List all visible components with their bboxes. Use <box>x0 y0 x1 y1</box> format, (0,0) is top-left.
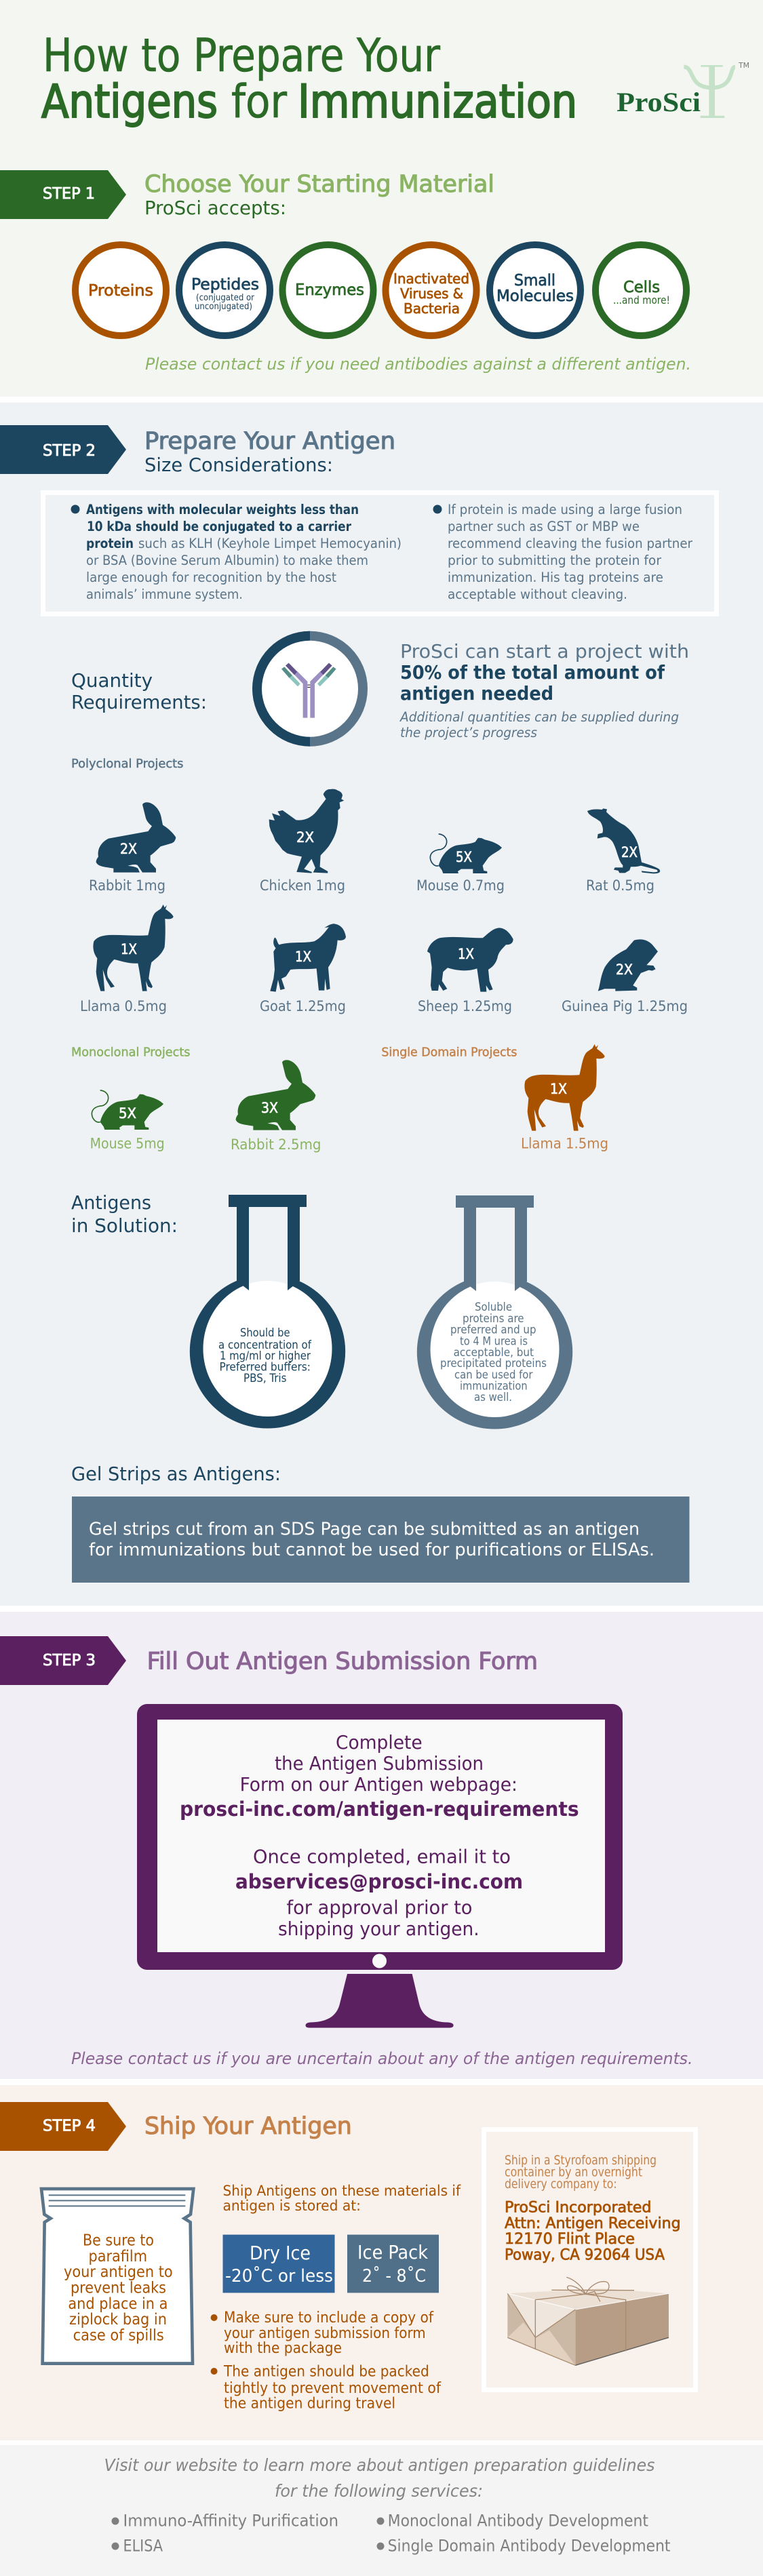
panel: size considerations box: immunization. His tag proteins are <box>448 570 663 585</box>
icon: chicken polyclonal: 2X <box>296 829 314 846</box>
panel: size considerations box: or BSA (Bovine Serum Albumin) to make them <box>86 553 368 568</box>
icon: sheep polyclonal <box>418 928 513 1014</box>
panel: size considerations box: such as KLH (Keyhole Limpet Hemocyanin) <box>138 536 402 551</box>
logo: ProSci: ProSci <box>617 87 701 117</box>
icon: ziplock bag: parafilm <box>88 2248 147 2265</box>
icon: flask solubility: acceptable, but <box>454 1346 534 1360</box>
panel: shipping address: 12170 Flint Place <box>505 2230 635 2248</box>
box: ice pack: Ice Pack <box>357 2242 429 2263</box>
note: uncertain about requirements: Please contact us if you are uncertain about any of the antigen requirements. <box>71 2049 693 2068</box>
heading: fill out antigen submission form: Fill Out Antigen Submission Form <box>147 1648 538 1675</box>
heading: single domain projects: Single Domain Projects <box>381 1046 517 1059</box>
panel: shipping address: ProSci Incorporated <box>505 2199 651 2217</box>
heading: antigens in solution <box>71 1191 178 1237</box>
icon: goat polyclonal: Goat 1.25mg <box>260 998 346 1014</box>
icon: computer monitor with instructions: prosci-inc.com/antigen-requirements <box>180 1798 579 1821</box>
circle: peptides <box>179 245 270 336</box>
icon: flask concentration: Should be <box>240 1326 290 1340</box>
list: services: Single Domain Antibody Development <box>388 2537 670 2556</box>
icon: guinea pig polyclonal <box>562 939 688 1014</box>
panel: shipping address <box>484 2129 696 2390</box>
icon: mouse polyclonal: Mouse 0.7mg <box>416 877 505 894</box>
panel: size considerations box: partner such as GST or MBP we <box>448 519 640 534</box>
icon: flask solubility: precipitated proteins <box>440 1357 547 1370</box>
icon: mouse monoclonal: 5X <box>119 1105 136 1122</box>
icon: sheep polyclonal: 1X <box>458 946 474 962</box>
list: services <box>111 2511 670 2556</box>
list: shipping tips <box>211 2309 442 2413</box>
icon: llama single domain: 1X <box>550 1081 567 1097</box>
callout: 50 percent of antigen: 50% of the total amount of <box>400 661 665 683</box>
icon: llama polyclonal <box>80 905 174 1014</box>
text: visit our website: Visit our website to learn more about antigen preparation guidelines <box>104 2455 655 2475</box>
note: contact us different antigen: Please contact us if you need antibodies against a different antigen. <box>145 355 691 374</box>
heading: antigens in solution: in Solution: <box>71 1214 178 1237</box>
text: ship antigens on these materials: Ship Antigens on these materials if <box>222 2183 461 2200</box>
icon: rat polyclonal <box>586 808 660 894</box>
arrow: step 4: STEP 4 <box>43 2117 96 2135</box>
box: dry ice <box>222 2235 335 2293</box>
heading: prepare your antigen: Prepare Your Antigen <box>144 428 395 455</box>
icon: sheep polyclonal: Sheep 1.25mg <box>418 998 512 1014</box>
panel: size considerations box: Antigens with molecular weights less than <box>86 502 359 517</box>
icon: chicken polyclonal <box>260 789 345 894</box>
box: ice pack: 2˚ - 8˚C <box>362 2266 426 2286</box>
icon: ziplock bag: and place in a <box>68 2295 168 2313</box>
panel: size considerations box: If protein is made using a large fusion <box>448 502 682 517</box>
circle: small molecules: Small <box>514 271 555 290</box>
icon: computer monitor with instructions: shipping your antigen. <box>278 1918 480 1940</box>
title: for <box>231 75 288 129</box>
logo: ProSci <box>617 61 749 118</box>
icon: flask solubility: preferred and up <box>450 1324 536 1337</box>
icon: computer monitor with instructions: for approval prior to <box>286 1897 472 1919</box>
callout: 50 percent of antigen: the project’s progress <box>400 725 537 740</box>
panel: size considerations box: large enough for recognition by the host <box>86 570 336 585</box>
icon: ziplock bag: ziplock bag in <box>69 2311 167 2329</box>
text: ship antigens on these materials <box>222 2183 461 2215</box>
icon: computer monitor with instructions: Once completed, email it to <box>253 1846 511 1868</box>
heading: quantity requirements: Quantity <box>71 669 153 692</box>
callout: 50 percent of antigen <box>399 640 689 740</box>
circle: small molecules: Molecules <box>496 286 574 305</box>
list: services: Immuno-Affinity Purification <box>123 2511 338 2530</box>
title: Immunization <box>298 75 577 129</box>
circle: enzymes: Enzymes <box>295 280 364 299</box>
panel: size considerations box: animals’ immune system. <box>86 587 243 602</box>
icon: llama single domain: Llama 1.5mg <box>521 1135 608 1151</box>
icon: flask concentration: 1 mg/ml or higher <box>220 1349 311 1363</box>
circle: cells and more: Cells <box>623 277 660 296</box>
icon: ziplock bag: Be sure to <box>83 2232 154 2250</box>
icon: guinea pig polyclonal: 2X <box>616 962 633 978</box>
icon: wrapped package <box>507 2277 669 2365</box>
title: Antigens <box>41 75 218 129</box>
list: shipping tips: the antigen during travel <box>224 2395 395 2413</box>
panel: shipping address: container by an overnight <box>505 2164 642 2179</box>
text: visit our website <box>104 2455 655 2501</box>
list: shipping tips: your antigen submission form <box>224 2324 426 2342</box>
icon: flask solubility: proteins are <box>463 1312 524 1326</box>
arrow: step 1: STEP 1 <box>43 185 95 203</box>
circle: proteins: Proteins <box>88 281 153 300</box>
subheading: prosci accepts: ProSci accepts: <box>144 197 286 219</box>
icon: computer monitor with instructions: Complete <box>336 1732 423 1753</box>
arrow: step 4 <box>0 2102 126 2151</box>
icon: flask concentration: Preferred buffers: <box>220 1361 311 1374</box>
list: shipping tips: with the package <box>224 2339 342 2357</box>
icon: computer monitor with instructions: Form on our Antigen webpage: <box>240 1774 517 1796</box>
heading: gel strips as antigens: Gel Strips as Antigens: <box>71 1463 281 1485</box>
icon: chicken polyclonal: Chicken 1mg <box>260 877 345 894</box>
icon: computer monitor with instructions <box>137 1704 623 2027</box>
icon: flask concentration: a concentration of <box>218 1339 312 1352</box>
panel: shipping address: Attn: Antigen Receiving <box>505 2215 681 2232</box>
panel: step 4 <box>0 2085 763 2440</box>
panel: header and step 1 <box>0 0 763 397</box>
circle: proteins <box>75 245 166 336</box>
heading: quantity requirements: Requirements: <box>71 691 207 713</box>
icon: flask solubility: can be used for <box>454 1368 533 1382</box>
panel: gel strips note: for immunizations but cannot be used for purifications or ELISAs. <box>89 1540 654 1560</box>
panel: gel strips note <box>72 1497 689 1583</box>
icon: flask solubility: as well. <box>474 1391 512 1404</box>
icon: mouse polyclonal: 5X <box>456 849 472 865</box>
heading: quantity requirements <box>71 669 207 713</box>
icon: mouse monoclonal: Mouse 5mg <box>90 1135 165 1151</box>
circle: inactivated viruses and bacteria: Inactivated <box>393 271 469 287</box>
callout: 50 percent of antigen: antigen needed <box>400 682 553 705</box>
heading: monoclonal projects: Monoclonal Projects <box>71 1046 190 1059</box>
arrow: step 1 <box>0 170 126 219</box>
list: shipping tips: tightly to prevent movement of <box>224 2379 442 2397</box>
arrow: step 3: STEP 3 <box>43 1652 96 1669</box>
icon: goat polyclonal: 1X <box>295 949 311 965</box>
icon: flask solubility: immunization <box>460 1379 528 1393</box>
panel: shipping address: Ship in a Styrofoam shipping <box>505 2153 657 2168</box>
icon: flask solubility <box>417 1195 572 1429</box>
arrow: step 2: STEP 2 <box>43 442 96 460</box>
icon: ziplock bag: your antigen to <box>64 2263 173 2281</box>
arrow: step 2 <box>0 425 126 474</box>
subheading: size considerations: Size Considerations: <box>144 454 333 476</box>
panel: step 3 <box>0 1612 763 2079</box>
circle: inactivated viruses and bacteria: Viruses & <box>400 285 463 302</box>
list: services: ELISA <box>123 2537 163 2556</box>
icon: guinea pig polyclonal: Guinea Pig 1.25mg <box>562 998 688 1014</box>
title: How to Prepare Your <box>43 29 441 83</box>
list: services: Monoclonal Antibody Development <box>388 2511 648 2530</box>
heading: polyclonal projects: Polyclonal Projects <box>71 757 183 771</box>
icon: rabbit monoclonal: 3X <box>261 1100 278 1116</box>
box: dry ice: -20˚C or less <box>225 2266 333 2286</box>
arrow: step 3 <box>0 1636 126 1685</box>
panel: size considerations box: acceptable without cleaving. <box>448 587 627 602</box>
icon: rabbit monoclonal: Rabbit 2.5mg <box>231 1136 321 1153</box>
icon: computer monitor with instructions: abservices@prosci-inc.com <box>235 1870 523 1893</box>
icon: rat polyclonal: Rat 0.5mg <box>586 877 654 894</box>
heading: antigens in solution: Antigens <box>71 1191 151 1214</box>
icon: flask concentration: PBS, Tris <box>243 1372 287 1385</box>
icon: llama single domain <box>521 1044 608 1151</box>
icon: ziplock bag: prevent leaks <box>71 2280 166 2297</box>
text: visit our website: for the following services: <box>275 2481 483 2501</box>
box: ice pack <box>347 2235 439 2293</box>
icon: rabbit polyclonal: Rabbit 1mg <box>89 877 165 894</box>
icon: llama polyclonal: Llama 0.5mg <box>80 998 167 1014</box>
panel: footer services <box>0 2445 763 2576</box>
circle: peptides: unconjugated) <box>195 302 252 312</box>
logo: ProSci: TM <box>738 61 749 70</box>
icon: ziplock bag: case of spills <box>73 2327 164 2345</box>
circle: peptides: Peptides <box>191 275 259 294</box>
icon: rabbit polyclonal <box>89 802 176 894</box>
circle: cells and more <box>595 245 686 336</box>
panel: step 2 <box>0 403 763 1606</box>
callout: 50 percent of antigen: Additional quantities can be supplied during <box>399 709 679 725</box>
list: shipping tips: The antigen should be packed <box>223 2362 429 2380</box>
panel: size considerations box: protein <box>86 536 134 551</box>
icon: llama polyclonal: 1X <box>121 941 137 957</box>
title <box>41 29 577 129</box>
icon: rabbit polyclonal: 2X <box>120 841 137 857</box>
icon: computer monitor with instructions: the Antigen Submission <box>275 1753 484 1775</box>
icon: ziplock bag <box>41 2189 193 2364</box>
circle: inactivated viruses and bacteria <box>385 245 476 336</box>
callout: 50 percent of antigen: ProSci can start a project with <box>400 640 689 662</box>
circle: inactivated viruses and bacteria: Bacteria <box>404 300 460 317</box>
panel: size considerations box: prior to submitting the protein for <box>448 553 662 568</box>
panel: size considerations box: recommend cleaving the fusion partner <box>448 536 693 551</box>
circle: small molecules <box>490 245 581 336</box>
text: ship antigens on these materials: antigen is stored at: <box>222 2198 361 2215</box>
icon: flask concentration <box>190 1195 345 1428</box>
box: dry ice: Dry Ice <box>250 2242 311 2264</box>
icon: mouse polyclonal <box>416 834 505 894</box>
icon: rat polyclonal: 2X <box>621 844 638 860</box>
list: shipping tips: Make sure to include a copy of <box>224 2309 434 2326</box>
circle: cells and more: ...and more! <box>613 294 670 306</box>
panel: gel strips note: Gel strips cut from an SDS Page can be submitted as an antigen <box>89 1520 640 1540</box>
icon: goat polyclonal <box>260 924 346 1014</box>
panel: shipping address: Poway, CA 92064 USA <box>505 2246 665 2263</box>
icon: flask solubility: Soluble <box>475 1301 512 1314</box>
icon: antibody in half ring <box>252 631 368 747</box>
heading: ship your antigen: Ship Your Antigen <box>144 2113 352 2140</box>
panel: size considerations box <box>43 492 716 614</box>
circle: enzymes <box>282 245 373 336</box>
circle: peptides: (conjugated or <box>196 293 254 303</box>
panel: shipping address: delivery company to: <box>505 2177 617 2192</box>
icon: flask solubility: to 4 M urea is <box>460 1335 528 1349</box>
icon: rabbit monoclonal <box>231 1060 321 1153</box>
icon: mouse monoclonal <box>90 1090 165 1151</box>
heading: choose your starting material: Choose Your Starting Material <box>144 171 494 198</box>
panel: size considerations box: 10 kDa should be conjugated to a carrier <box>87 519 351 534</box>
